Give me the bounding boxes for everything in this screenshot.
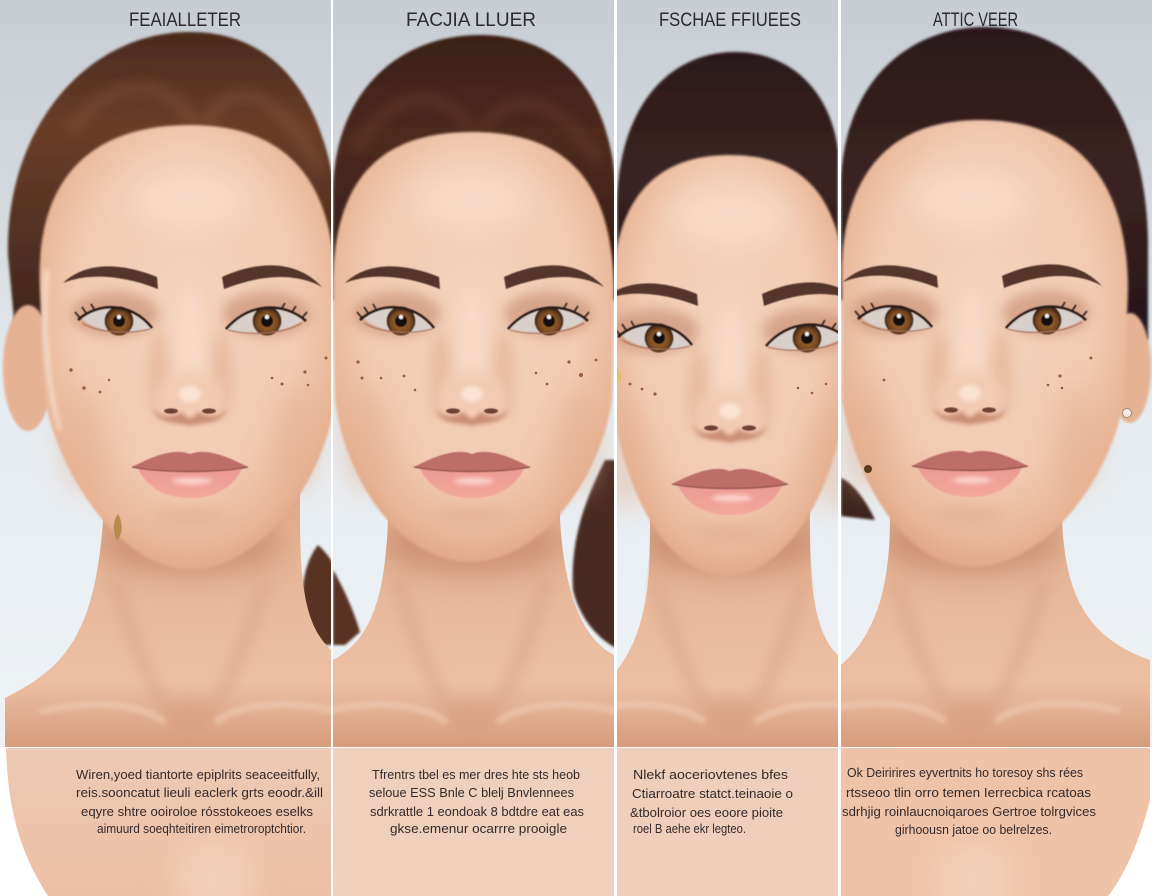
facial features 4 [840,169,1102,523]
panel: filler portrait 3 [617,0,838,747]
description 1: aimuurd soeqhteitiren eimetroroptchtior. [97,821,306,836]
description 1: reis.sooncatut lieuli eaclerk grts eoodr.&ill [76,785,323,800]
ponytail 1 [302,544,331,647]
ponytail 4 [841,478,875,520]
freckles 1 [69,356,328,393]
description 3: roel B aehe ekr legteo. [633,821,746,836]
description 3: Ctiarroatre statct.teinaoie o [632,786,793,801]
description 4 [842,765,1097,837]
skin droplet 1 [114,514,122,540]
neck and shoulders 1 [5,492,331,747]
hair 1 [8,32,335,350]
panel: filler portrait 2 [322,0,622,747]
text band 3 [617,748,838,896]
hair 3 [617,50,838,255]
face shape 3 [612,155,845,576]
description 4: Ok Deiririres eyvertnits ho toresoy shs rées [847,765,1083,780]
neck and shoulders 2 [333,512,614,747]
panel: filler portrait 4 [820,0,1152,747]
description 4: sdrhjig roinlaucnoiqaroes Gertroe tolrgvices [842,804,1097,819]
description 1: Wiren,yoed tiantorte epiplrits seaceeitfully, [76,767,320,782]
chest highlight in band 4 [935,840,1015,896]
hair strands 1 [70,88,320,170]
description 3: &tbolroior oes eoore pioite [630,805,783,820]
description 2: gkse.emenur ocarrre prooigle [390,821,567,836]
title 1: FEAIALLETER [129,10,241,31]
hair strands 2 [355,99,600,165]
backdrop 3 [617,0,838,670]
text band 2 [333,748,614,896]
face shape 2 [333,132,614,562]
description 4: rtsseoo tlin orro temen Ierrecbica rcatoas [846,785,1092,800]
description 2: seloue ESS Bnle C blelj Bnvlennees [369,785,574,800]
ear 4 [1120,311,1152,424]
ear 1 [3,305,53,431]
face shape 1 [40,125,335,570]
description 4: girhoousn jatoe oo belrelzes. [895,822,1052,837]
text band 1 [6,748,331,896]
description 2 [369,767,584,836]
backdrop 4 [841,0,1152,747]
description 1 [76,767,323,836]
backdrop 1 [0,0,331,747]
title 3: FSCHAE FFIUEES [659,10,801,31]
ponytail 2 [573,460,616,648]
description 2: sdrkrattle 1 eondoak 8 bdtdre eat eas [370,804,584,819]
freckles 2 [356,359,597,391]
description 3 [630,767,793,836]
facial features 3 [617,184,838,534]
freckles 3 [629,383,827,396]
neck and shoulders 3 [617,510,838,747]
chest highlight in band 1 [175,840,255,896]
description 2: Tfrentrs tbel es mer dres hte sts heob [372,767,580,782]
cheek rim highlight 1 [45,270,60,430]
ponytail spill from panel 1 [333,570,360,645]
panel: filler portrait 1 [0,0,360,747]
description 1: eqyre shtre ooiroloe rósstokeoes eselks [81,804,314,819]
earring [1122,408,1132,418]
title 4: ATTIC VEER [933,10,1018,31]
hair 4 [841,27,1148,340]
title 2: FACJIA LLUER [406,10,536,31]
hair 2 [333,35,616,300]
face shape 4 [842,120,1128,567]
facial features 1 [60,170,322,524]
skin mark 4 [864,465,872,473]
freckles 4 [883,356,1092,389]
backdrop 2 [333,0,614,660]
facial features 2 [342,170,604,524]
skin droplet 3 [617,366,622,384]
neck and shoulders 4 [841,516,1150,747]
description 3: Nlekf aoceriovtenes bfes [633,767,789,782]
text band 4 [841,748,1150,896]
